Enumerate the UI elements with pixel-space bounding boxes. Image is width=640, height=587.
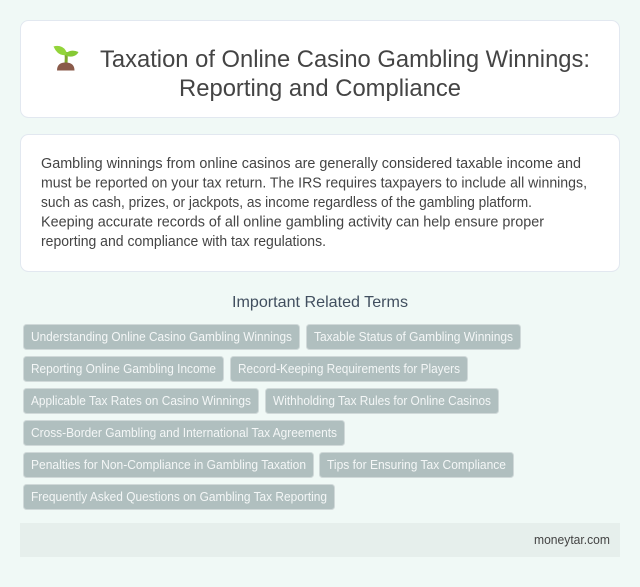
- title: [100, 46, 590, 102]
- panel: summary text: Keeping accurate records of all online gambling activity can help ensure proper: [41, 214, 544, 230]
- tag: Applicable Tax Rates on Casino Winnings: [31, 394, 251, 408]
- tag: [266, 388, 498, 414]
- tag: [230, 356, 468, 382]
- tag: [24, 324, 300, 350]
- tag: Penalties for Non-Compliance in Gambling Taxation: [31, 458, 306, 472]
- tag: [24, 484, 334, 510]
- footer bar: moneytar.com: [534, 533, 610, 547]
- tag: Understanding Online Casino Gambling Winnings: [31, 330, 292, 344]
- heading: related terms: Important Related Terms: [232, 294, 408, 311]
- tag list: [24, 324, 520, 510]
- panel: summary text: reporting and compliance with tax regulations.: [41, 234, 326, 250]
- tag: Frequently Asked Questions on Gambling Tax Reporting: [31, 490, 327, 504]
- tag: [24, 356, 224, 382]
- tag: Record-Keeping Requirements for Players: [238, 362, 460, 376]
- tag: Cross-Border Gambling and International Tax Agreements: [31, 426, 337, 440]
- title: Taxation of Online Casino Gambling Winnings:: [100, 46, 590, 73]
- panel: summary text: must be reported on your tax return. The IRS requires taxpayers to include all winnings,: [41, 176, 587, 192]
- footer bar: [20, 523, 620, 557]
- panel: summary text: Gambling winnings from online casinos are generally considered taxable income and: [41, 156, 581, 172]
- panel: summary text: such as cash, prizes, or jackpots, as income regardless of the gambling platform.: [41, 195, 532, 211]
- tag: Withholding Tax Rules for Online Casinos: [273, 394, 491, 408]
- tag: [24, 388, 258, 414]
- tag: Taxable Status of Gambling Winnings: [314, 330, 513, 344]
- tag: [24, 420, 344, 446]
- panel: summary text: [20, 134, 620, 272]
- title: Reporting and Compliance: [179, 75, 461, 102]
- tag: [320, 452, 514, 478]
- tag: [306, 324, 520, 350]
- panel: title card: [20, 20, 620, 118]
- tag: Reporting Online Gambling Income: [31, 362, 216, 376]
- icon: seedling: [54, 46, 78, 70]
- tag: [24, 452, 314, 478]
- tag: Tips for Ensuring Tax Compliance: [327, 458, 506, 472]
